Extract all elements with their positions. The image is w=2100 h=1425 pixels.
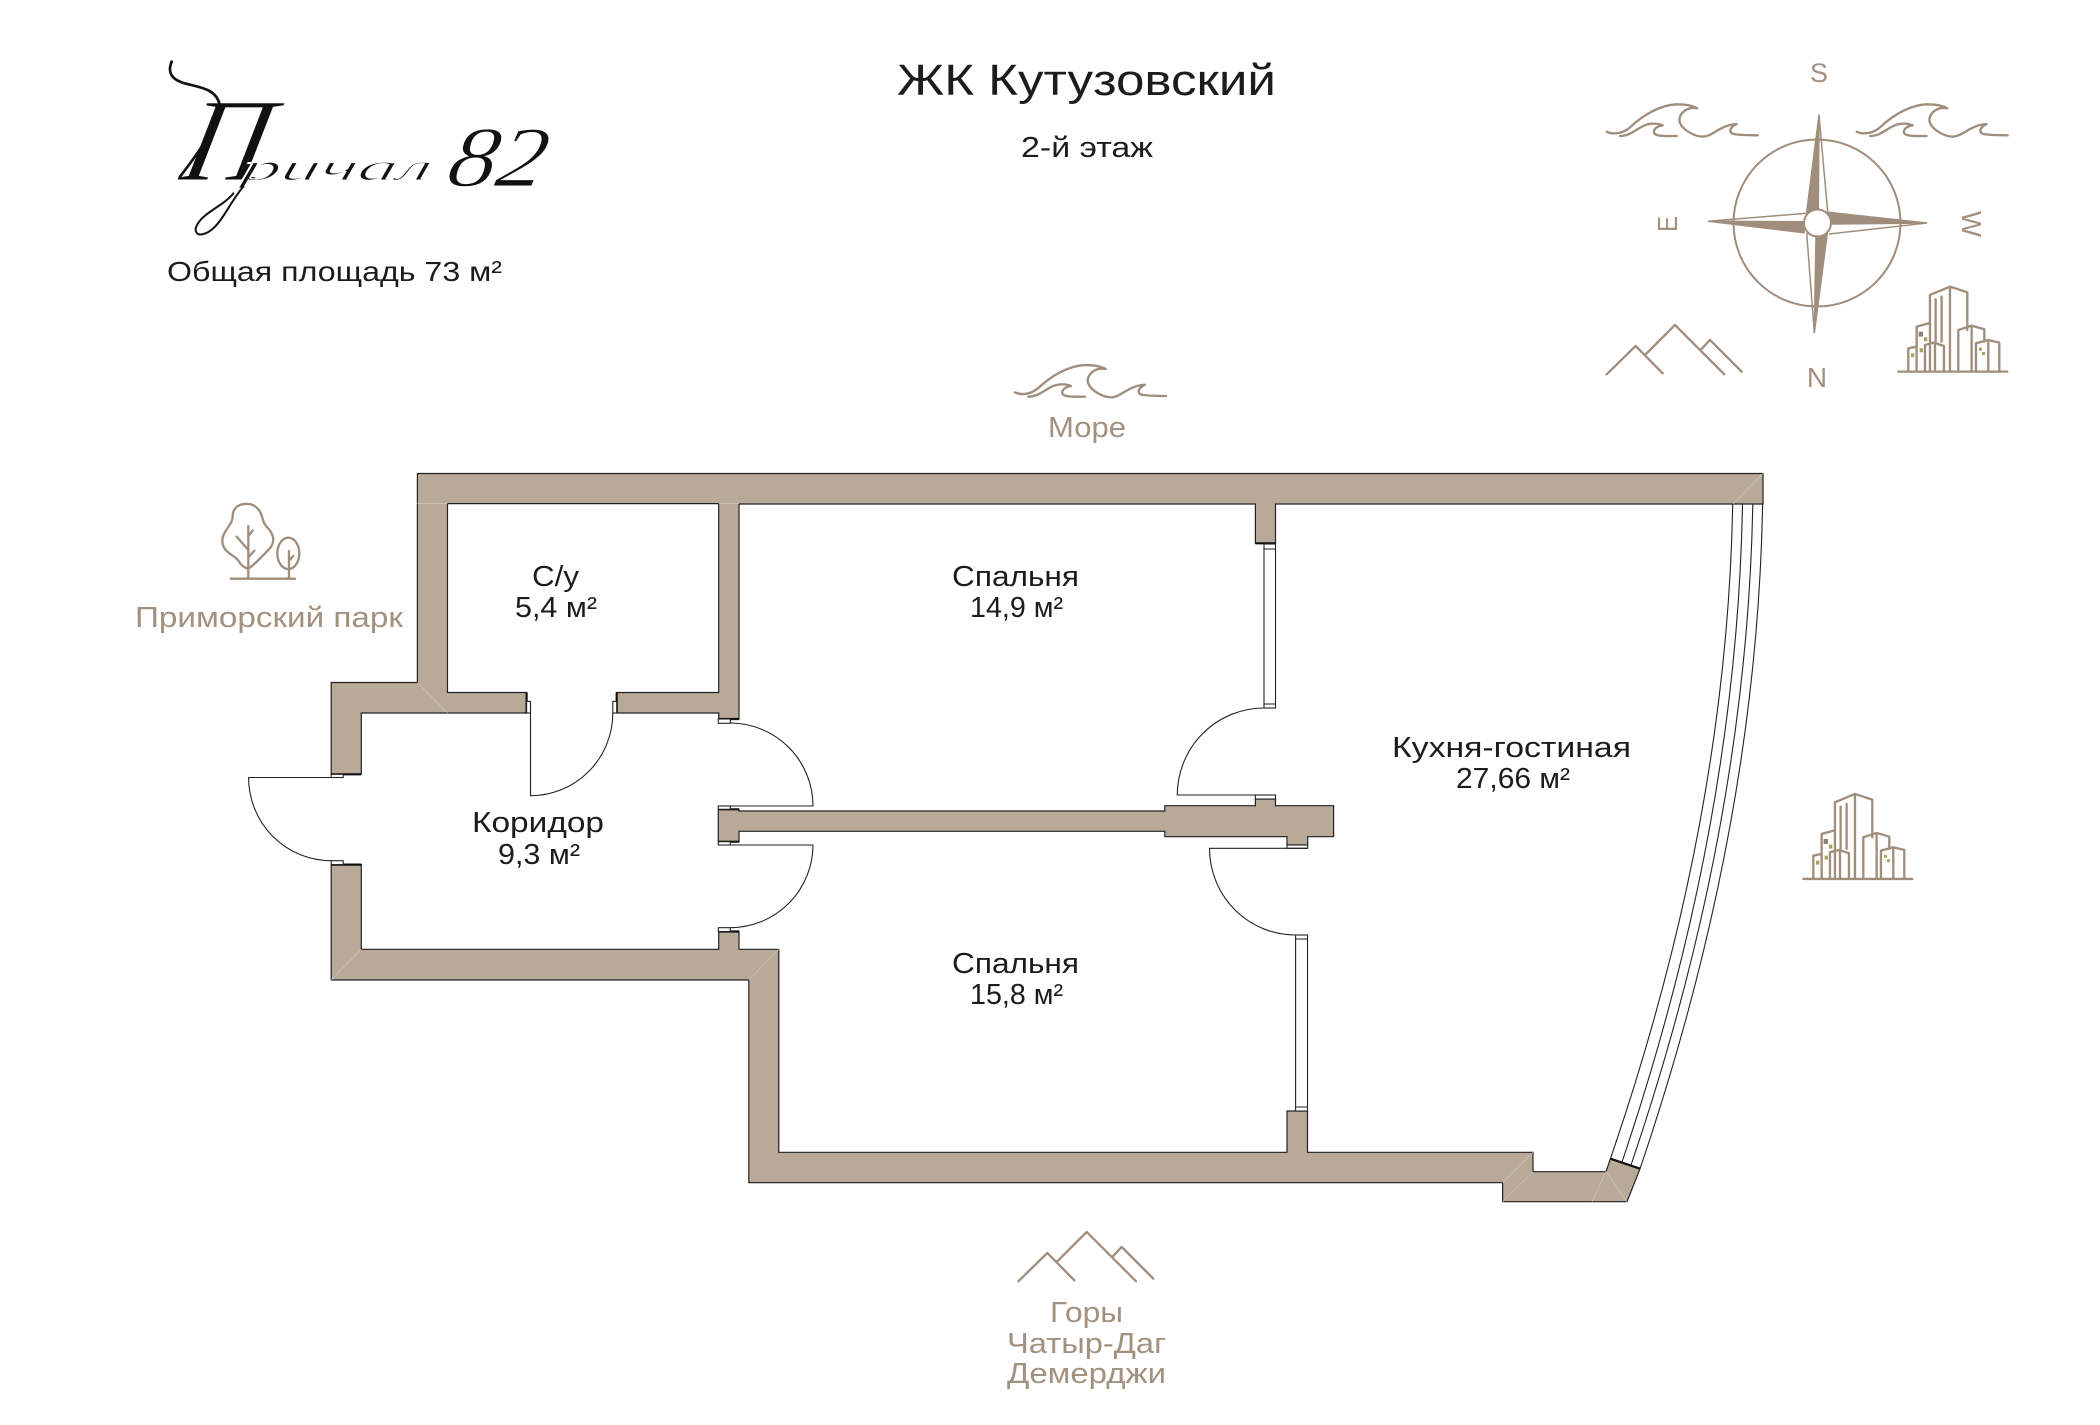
room label: bedroom 1: 14,9 м² xyxy=(970,592,1063,624)
compass letter S: S xyxy=(1810,58,1828,88)
compass letter N: N xyxy=(1807,362,1827,393)
room label: corridor: Коридор xyxy=(472,807,604,839)
window: bedroom 1 xyxy=(1264,544,1276,708)
walls: central partition xyxy=(718,799,1334,845)
room label: bathroom: 5,4 м² xyxy=(515,592,597,624)
room label: bedroom 2 xyxy=(952,948,1079,1011)
room label: bedroom 2: Спальня xyxy=(952,948,1079,980)
icon: mountains, compass xyxy=(1607,325,1742,374)
icon: waves, compass right xyxy=(1857,104,2008,137)
total area text: Общая площадь 73 м² xyxy=(167,256,502,287)
label: mountains: Чатыр-Даг xyxy=(1007,1328,1166,1360)
room label: bedroom 1 xyxy=(952,561,1079,624)
logo: Причал 82 xyxy=(170,62,565,234)
room label: bedroom 1: Спальня xyxy=(952,561,1079,593)
compass rose xyxy=(1652,58,1987,393)
door: bedroom 1 to living room xyxy=(1177,708,1276,799)
icon: city, east side xyxy=(1803,794,1912,879)
label: mountains: Горы xyxy=(1050,1297,1123,1329)
label: mountains xyxy=(1007,1297,1166,1390)
door: bathroom xyxy=(527,701,617,796)
room label: bathroom xyxy=(515,561,597,624)
door: bedroom 2 from corridor xyxy=(718,842,813,932)
icon: waves, compass left xyxy=(1607,104,1758,137)
room label: corridor xyxy=(472,807,604,871)
door: entrance xyxy=(249,774,343,865)
walls: upper section xyxy=(331,474,1763,774)
window: bedroom 2 xyxy=(1296,935,1308,1111)
icon: mountains, south side xyxy=(1018,1232,1153,1281)
walls: lower section xyxy=(331,865,1640,1202)
room label: kitchen-living room: 27,66 м² xyxy=(1456,763,1570,795)
compass star xyxy=(1708,115,1927,333)
door: bedroom 1 from corridor xyxy=(718,719,813,809)
room label: corridor: 9,3 м² xyxy=(498,839,580,871)
floor subtitle: 2-й этаж xyxy=(1021,132,1154,164)
room label: bathroom: С/у xyxy=(532,561,580,593)
compass letter W: W xyxy=(1956,211,1987,238)
icon: waves, sea xyxy=(1015,365,1166,397)
icon: park trees xyxy=(222,504,299,579)
label: park: Приморский парк xyxy=(135,602,403,634)
room label: kitchen-living room: Кухня-гостиная xyxy=(1392,732,1631,764)
logo: Причал 82: ричал xyxy=(232,147,437,189)
label: mountains: Демерджи xyxy=(1007,1358,1166,1390)
logo: Причал 82: 82 xyxy=(440,110,558,205)
icon: city, compass xyxy=(1898,287,2007,372)
door: bedroom 2 to living room xyxy=(1210,845,1308,935)
room label: kitchen-living room xyxy=(1392,732,1631,795)
compass letter E: E xyxy=(1652,216,1683,232)
floor plan xyxy=(249,474,1763,1202)
title: ЖК Кутузовский xyxy=(897,56,1276,105)
compass centre xyxy=(1804,210,1831,236)
label: sea: Море xyxy=(1048,412,1126,444)
curved panoramic window xyxy=(1610,504,1763,1169)
logo: Причал 82: П xyxy=(171,75,291,206)
room label: bedroom 2: 15,8 м² xyxy=(970,979,1063,1011)
compass circle xyxy=(1734,140,1900,306)
